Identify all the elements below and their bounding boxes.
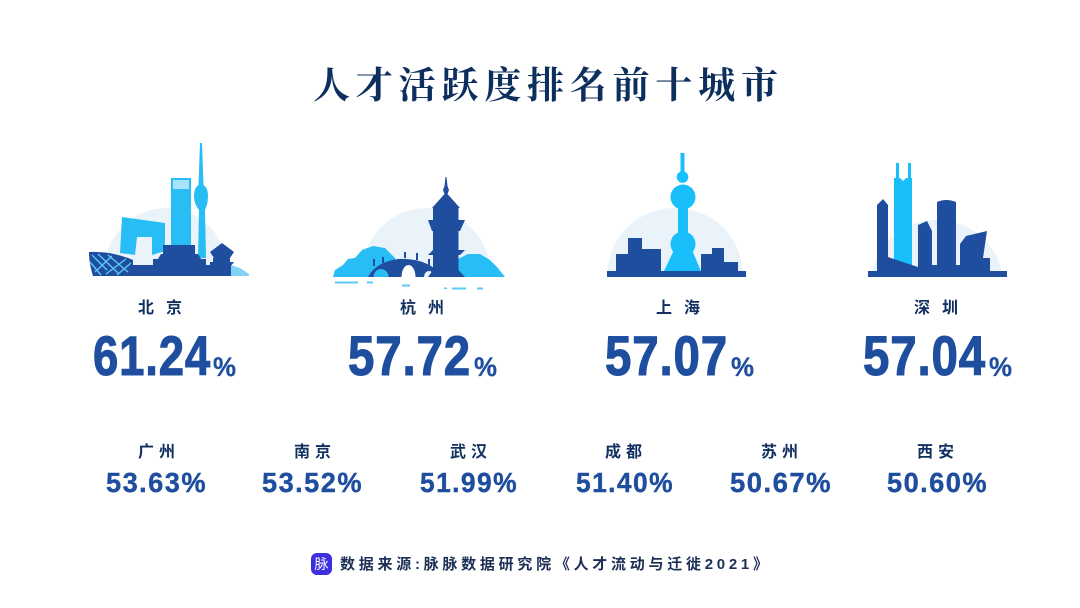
value: % <box>474 352 497 382</box>
value: % <box>731 352 754 382</box>
city label: 上海 <box>656 299 712 317</box>
ranking item: Wuhan <box>420 443 518 498</box>
source line <box>311 553 768 575</box>
value: 61.24 <box>93 324 211 387</box>
ranking item: Chengdu: 成都 <box>605 442 647 461</box>
ranking item: Wuhan: 武汉 <box>450 443 492 461</box>
ranking item: Nanjing: 南京 <box>294 442 336 461</box>
ranking item: Xi'an: 50.60% <box>887 467 988 498</box>
ranking item: Suzhou: 50.67% <box>730 467 832 498</box>
city label: 北京 <box>138 298 194 317</box>
ranking item: Guangzhou <box>106 443 207 498</box>
ranking item: Guangzhou: 广州 <box>138 443 180 461</box>
icon: Maimai logo <box>311 553 332 575</box>
ranking item: Guangzhou: 53.63% <box>106 467 207 498</box>
panel: Shanghai <box>605 153 754 387</box>
value: 57.72 <box>348 324 471 387</box>
ranking item: Suzhou <box>730 442 832 498</box>
city label: 杭州 <box>400 298 456 317</box>
icon: Shenzhen skyline <box>868 163 1007 277</box>
value: % <box>213 352 236 382</box>
ranking item: Chengdu: 51.40% <box>576 467 674 498</box>
icon: Beijing skyline <box>89 143 249 276</box>
panel: Beijing <box>89 143 249 387</box>
value: 57.07 <box>605 324 728 387</box>
city label: 深圳 <box>914 299 970 317</box>
icon: Hangzhou pagoda and bridge <box>333 177 505 290</box>
ranking item: Xi'an <box>887 443 988 498</box>
ranking item: Wuhan: 51.99% <box>420 467 518 498</box>
source text: 数据来源:脉脉数据研究院《人才流动与迁徙2021》 <box>340 555 768 573</box>
title: 人才活跃度排名前十城市 <box>313 65 778 107</box>
panel: Shenzhen <box>863 163 1012 387</box>
ranking item: Chengdu <box>576 442 674 498</box>
ranking item: Xi'an: 西安 <box>917 443 959 461</box>
value: 57.04 <box>863 324 986 387</box>
ranking item: Suzhou: 苏州 <box>761 442 803 461</box>
icon: Maimai logo: 脉 <box>314 556 328 572</box>
ranking item: Nanjing <box>262 442 363 498</box>
value: % <box>989 352 1012 382</box>
icon: Shanghai skyline <box>607 153 746 277</box>
ranking item: Nanjing: 53.52% <box>262 467 363 498</box>
panel: Hangzhou <box>333 177 505 387</box>
